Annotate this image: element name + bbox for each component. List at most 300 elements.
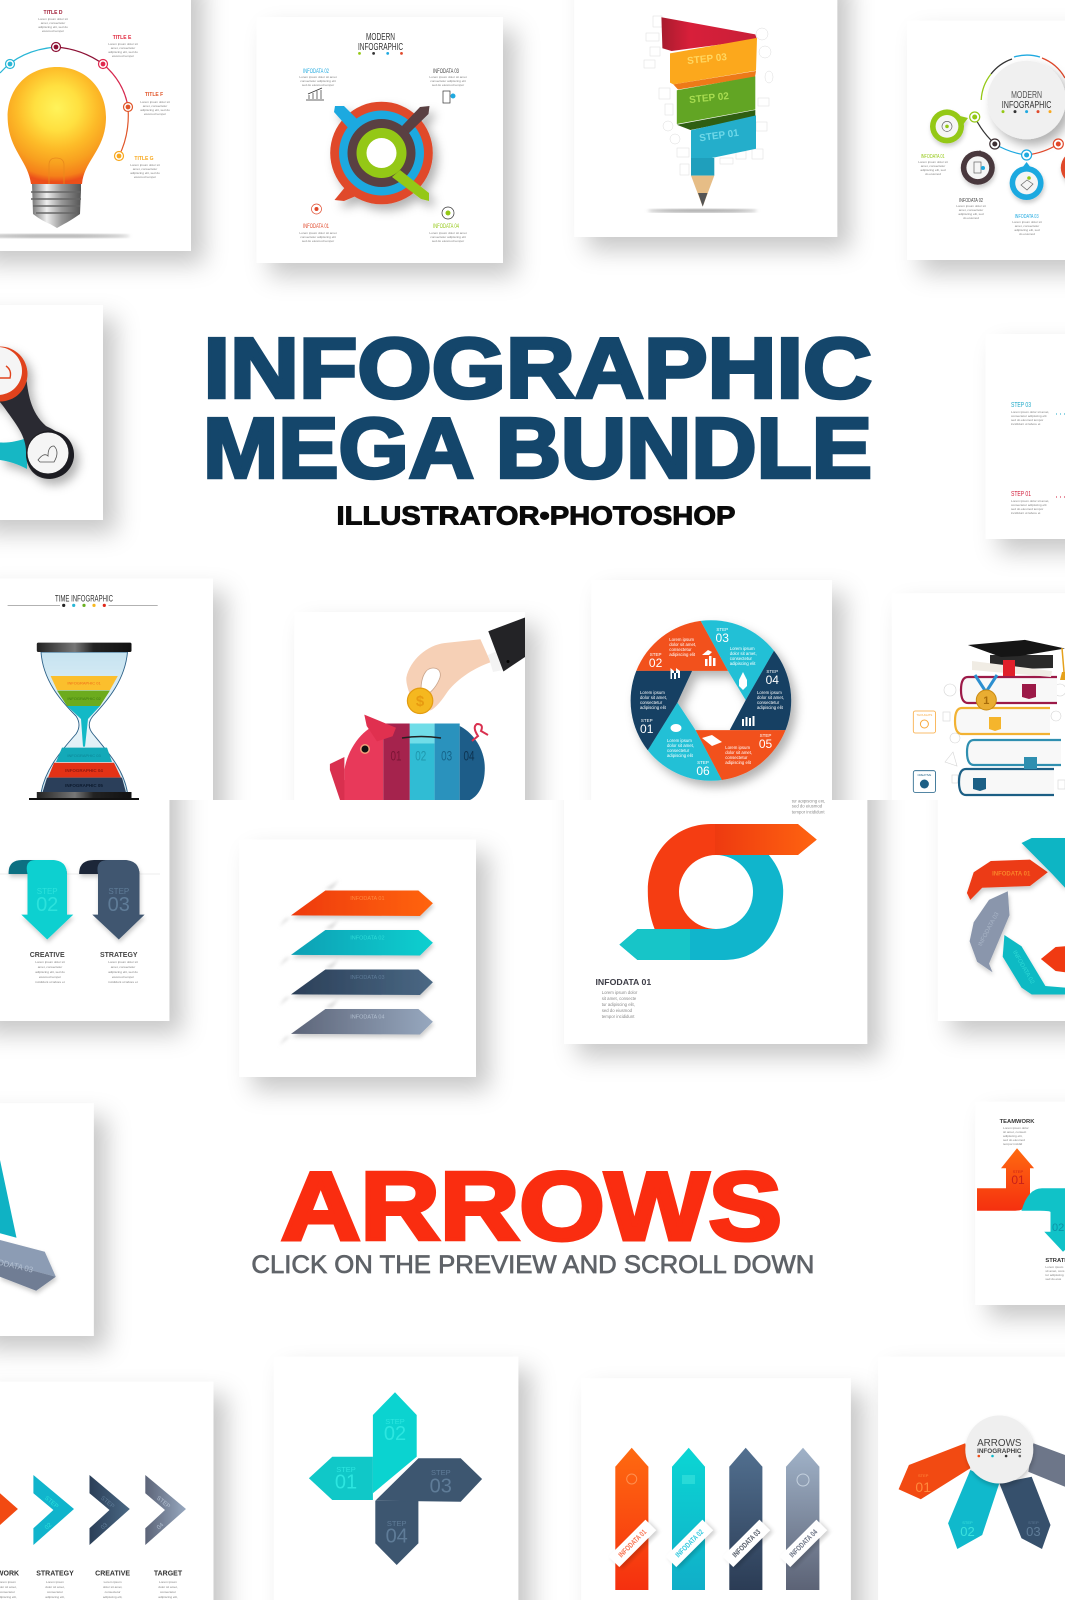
- red arrow up: STEP: [1013, 1169, 1024, 1174]
- step numbers: 03: [716, 631, 729, 645]
- step numbers: 02: [649, 656, 663, 670]
- chevrons: STEP: [99, 1495, 115, 1510]
- petal 02 teal: [948, 1470, 999, 1549]
- panel: down arrows: [0, 760, 169, 1021]
- panel: hourglass: [0, 579, 213, 839]
- arrow 02: INFODATA 02: [673, 1527, 705, 1559]
- chevrons: STEP: [43, 1495, 59, 1510]
- central disc: INFOGRAPHIC: [977, 1449, 1022, 1455]
- teal ribbon: [0, 1160, 16, 1238]
- step numbers: 04: [766, 673, 779, 687]
- chevron captions: Lorem ipsum: [104, 1580, 122, 1584]
- teal arrow down: [1022, 1188, 1065, 1252]
- step labels: adipiscing elit, sed do: [38, 25, 68, 29]
- arrow red small: [1041, 946, 1065, 972]
- panel: cross arrows: [274, 1357, 518, 1600]
- flag 04: [291, 1009, 433, 1034]
- step 01: sed do eiusmod tempor: [1011, 507, 1043, 511]
- flag 02: [291, 930, 433, 956]
- arrow red 01: [967, 860, 1048, 900]
- step labels: TITLE G: [134, 156, 154, 162]
- step texts: adipiscing elit: [669, 652, 696, 657]
- step numbers: STEP: [108, 887, 129, 896]
- bookmarks: [973, 684, 1037, 791]
- arrow step 01: [309, 1457, 373, 1500]
- arrow step 03: [79, 860, 145, 940]
- pin labels: Lorem ipsum dolor sit: [918, 160, 948, 164]
- step labels: [38, 10, 170, 179]
- data labels: sed do eiusmod tempor: [432, 83, 464, 87]
- lower background: [0, 800, 1065, 1600]
- arrow teal bottom: [1003, 935, 1065, 994]
- step numbers: 04: [386, 1525, 408, 1547]
- captions: adipiscing elit, sed do: [108, 970, 138, 974]
- arrow 03: [723, 1448, 770, 1590]
- data text: [596, 798, 825, 1019]
- data labels: INFODATA 04: [433, 224, 459, 230]
- step labels: amet, consectetur: [41, 21, 65, 25]
- coin: [407, 688, 433, 714]
- step labels: amet, consectetur: [133, 167, 157, 171]
- panel: hexagon cycle: [630, 582, 857, 800]
- step texts: consectetur: [667, 748, 690, 753]
- step labels: eiusmod tempor: [144, 112, 166, 116]
- outer arcs: [981, 55, 1065, 100]
- captions: eiusmod tempor: [112, 975, 134, 979]
- flag fold tails: [279, 880, 339, 1046]
- chevron captions: adipiscing elit,: [103, 1595, 122, 1599]
- data labels: consectetur adipiscing elit: [300, 235, 336, 239]
- step labels: adipiscing elit, sed do: [108, 50, 138, 54]
- chevron captions: TARGET: [154, 1570, 183, 1578]
- step numbers: STEP: [716, 627, 728, 632]
- captions: CREATIVE: [30, 952, 65, 959]
- data labels: consectetur adipiscing elit: [430, 235, 466, 239]
- step 03: sed do eiusmod tempor: [1011, 418, 1043, 422]
- step numbers: [640, 627, 779, 778]
- panel heading: INFOGRAPHIC: [358, 42, 403, 53]
- icon boxes: [913, 711, 936, 792]
- hourglass chart: INFOGRAPHIC 03: [67, 753, 101, 758]
- step numbers: 02: [384, 1423, 406, 1445]
- chevrons: 02: [44, 1522, 54, 1531]
- data labels: Lorem ipsum dolor sit amet: [299, 75, 337, 79]
- flag 02: INFODATA 02: [350, 936, 385, 942]
- step labels: TITLE E: [113, 35, 132, 41]
- arrow 02: [666, 1448, 713, 1590]
- knot shape: [0, 346, 74, 479]
- arrow 04: [780, 1448, 827, 1590]
- panel: chevron arrows: [0, 1382, 214, 1600]
- step numbers: 03: [108, 894, 130, 916]
- chevron captions: adipiscing elit,: [45, 1595, 65, 1599]
- step labels: amet, consectetur: [111, 46, 135, 50]
- step labels: adipiscing elit, sed do: [130, 171, 160, 175]
- data labels: Lorem ipsum dolor sit amet: [429, 75, 467, 79]
- data labels: INFODATA 02: [303, 69, 329, 75]
- petal 01 red: [899, 1443, 970, 1499]
- pin icons: [942, 121, 1033, 190]
- coin: $: [416, 693, 425, 710]
- panel: modern infographic pins: [907, 21, 1065, 260]
- petal 02 teal: 02: [960, 1524, 975, 1539]
- grey arrow: [0, 1240, 56, 1291]
- step texts: [640, 637, 784, 765]
- step texts: Lorem ipsum: [757, 690, 782, 695]
- captions: incididunt ut labore et: [35, 980, 65, 984]
- petal 03 navy: STEP: [1028, 1520, 1039, 1525]
- captions: Lorem ipsum dolor sit: [108, 960, 138, 964]
- pin labels: INFODATA 01: [921, 154, 945, 160]
- data labels: sed do eiusmod tempor: [302, 239, 334, 243]
- step numbers: STEP: [387, 1519, 406, 1528]
- teamwork text: tempor incidid: [1003, 1142, 1023, 1146]
- chevron captions: Lorem ipsum: [159, 1580, 177, 1584]
- section subtitle: CLICK ON THE PREVIEW AND SCROLL DOWN: [251, 1251, 814, 1279]
- panel heading: TIME INFOGRAPHIC: [55, 593, 113, 603]
- hourglass chart: INFOGRAPHIC 05: [65, 783, 103, 788]
- step texts: Lorem ipsum: [730, 646, 755, 651]
- strategy text: sit amet, cons: [1045, 1269, 1065, 1273]
- icon outlines: [0, 366, 57, 462]
- captions: [30, 952, 138, 984]
- panel: light bulb timeline: [0, 0, 191, 251]
- panel: triangle arrow: [0, 1103, 94, 1336]
- arrow 01: INFODATA 01: [616, 1527, 648, 1559]
- pin labels: [918, 154, 1042, 236]
- pin labels: adipiscing elit, sed: [920, 168, 946, 172]
- panel: graduation books: [892, 593, 1065, 853]
- step numbers: STEP: [431, 1468, 451, 1477]
- data labels: consectetur adipiscing elit: [300, 79, 336, 83]
- step texts: consectetur: [640, 700, 663, 705]
- step texts: consectetur: [669, 647, 692, 652]
- pin labels: do eiusmod: [1019, 232, 1035, 236]
- chevron captions: consectetur: [47, 1590, 63, 1594]
- data text: sed do eiusmod: [792, 804, 823, 808]
- chevron captions: [0, 1570, 183, 1599]
- step texts: adipiscing elit: [730, 661, 756, 666]
- chevron captions: dolor sit amet,: [45, 1585, 65, 1589]
- chevron captions: adipiscing elit,: [158, 1595, 178, 1599]
- icon boxes: CREATIVE: [918, 773, 931, 777]
- data text: sed do eiusmod: [602, 1008, 633, 1013]
- central disc: ARROWS: [977, 1438, 1022, 1449]
- data labels: sed do eiusmod tempor: [302, 83, 334, 87]
- petal 03 navy: 03: [1026, 1524, 1041, 1539]
- step 03: [1011, 402, 1065, 426]
- data labels: INFODATA 01: [303, 224, 329, 230]
- step texts: adipiscing elit: [640, 705, 667, 710]
- medal: [975, 675, 997, 710]
- data text: tempor incididunt: [602, 1014, 635, 1019]
- pin labels: amet, consectetur: [959, 208, 983, 212]
- data text: tempor incididunt: [792, 810, 825, 814]
- pig body: 02: [415, 747, 426, 763]
- chevron captions: consectetur: [160, 1590, 176, 1594]
- central disc: [965, 1416, 1033, 1484]
- step labels: TITLE D: [44, 10, 63, 16]
- step texts: Lorem ipsum: [640, 690, 665, 695]
- step 03: STEP 03: [1011, 402, 1031, 409]
- arrow step 02: [373, 1392, 417, 1493]
- step numbers: 02: [36, 894, 58, 916]
- title: INFOGRAPHIC: [204, 322, 872, 417]
- step texts: dolor sit amet,: [730, 651, 757, 656]
- step numbers: 06: [696, 764, 710, 778]
- step numbers: STEP: [650, 652, 661, 657]
- step texts: Lorem ipsum: [725, 745, 750, 750]
- teamwork text: [1000, 1119, 1035, 1146]
- step texts: adipiscing elit: [757, 705, 784, 710]
- data text: tur adipiscing elit,: [792, 798, 825, 804]
- teamwork text: Lorem ipsum dolor: [1003, 1126, 1029, 1130]
- hourglass chart: [29, 643, 139, 800]
- step numbers: STEP: [697, 760, 709, 765]
- step labels: eiusmod tempor: [42, 29, 64, 33]
- step labels: STEP 03: [687, 52, 728, 67]
- panel heading: MODERN: [366, 32, 395, 43]
- chevrons: STEP: [155, 1495, 171, 1510]
- chevron captions: Lorem ipsum: [46, 1580, 64, 1584]
- arrow red 01: INFODATA 01: [992, 872, 1031, 878]
- title: MEGA BUNDLE: [203, 402, 872, 497]
- chevron captions: dolor sit amet,: [158, 1585, 178, 1589]
- step labels: Lorem ipsum dolor sit: [108, 42, 138, 46]
- panel heading: [358, 32, 403, 55]
- pin labels: amet, consectetur: [1015, 224, 1039, 228]
- step 01: incididunt ut labore et: [1011, 511, 1041, 515]
- step 01: [1011, 491, 1065, 515]
- captions: amet, consectetur: [38, 965, 62, 969]
- step numbers: 01: [335, 1471, 357, 1493]
- doodles: [943, 684, 1065, 789]
- step numbers: 05: [759, 737, 772, 751]
- pin labels: amet, consectetur: [921, 164, 945, 168]
- step 01: Lorem ipsum dolor sit amet,: [1011, 499, 1049, 503]
- pig body: 01: [390, 747, 402, 763]
- captions: STRATEGY: [100, 952, 138, 959]
- data labels: INFODATA 03: [433, 69, 459, 75]
- strategy text: [1045, 1258, 1065, 1281]
- step 01: STEP 01: [1011, 491, 1031, 498]
- arrow step 03: [375, 1458, 482, 1502]
- petal 04 grey: [1028, 1443, 1065, 1487]
- petal 01 red: 01: [915, 1479, 931, 1495]
- arrow grey: INFODATA 03: [978, 911, 1001, 947]
- step labels: eiusmod tempor: [134, 175, 156, 179]
- pins: [930, 109, 1065, 200]
- doodle icons: [644, 16, 773, 175]
- step numbers: [36, 887, 130, 916]
- captions: incididunt ut labore et: [108, 980, 138, 984]
- pig body: 03: [441, 747, 452, 763]
- step 03: Lorem ipsum dolor sit amet,: [1011, 410, 1049, 414]
- panel: team arrows: [975, 1102, 1065, 1305]
- strategy text: sed do eius: [1045, 1277, 1062, 1281]
- chevron captions: CREATIVE: [95, 1570, 130, 1578]
- medal: 1: [983, 695, 989, 707]
- panel: cycle arrows: [938, 760, 1065, 1021]
- panel: step list: [988, 402, 1065, 564]
- section title: arrows: ARROWS: [281, 1154, 782, 1261]
- data text: INFODATA 01: [596, 977, 651, 987]
- data labels: sed do eiusmod tempor: [432, 239, 464, 243]
- data text: Lorem ipsum dolor: [602, 990, 638, 995]
- pin labels: adipiscing elit, sed: [958, 212, 984, 216]
- bulb shadow: [0, 234, 130, 238]
- step labels: Lorem ipsum dolor sit: [140, 100, 170, 104]
- strategy text: tur adipiscing: [1045, 1273, 1064, 1277]
- step texts: adipiscing elit: [725, 760, 752, 765]
- cycle chart: [631, 620, 791, 781]
- step labels: amet, consectetur: [143, 104, 167, 108]
- panel heading: [8, 595, 158, 607]
- data labels: [299, 69, 467, 243]
- step labels: STEP 01: [699, 128, 740, 144]
- hand with suit sleeve: [406, 618, 525, 710]
- step numbers: [335, 1417, 452, 1547]
- step texts: consectetur: [757, 700, 780, 705]
- red arrow up: 01: [1011, 1173, 1025, 1187]
- upper collage section: [0, 0, 1065, 853]
- panel: stacked flags: [239, 840, 476, 1077]
- icon boxes: THOUGHTS: [917, 713, 932, 717]
- teamwork text: sit amet, consect: [1003, 1130, 1026, 1134]
- step texts: dolor sit amet,: [640, 695, 667, 700]
- ribbon pencil: [647, 17, 757, 212]
- step 01: consectetur adipiscing elit: [1011, 503, 1047, 507]
- chevrons: 04: [156, 1522, 166, 1531]
- step texts: dolor sit amet,: [757, 695, 784, 700]
- chevron captions: consectetur: [105, 1590, 121, 1594]
- step labels: Lorem ipsum dolor sit: [38, 17, 68, 21]
- data labels: Lorem ipsum dolor sit amet: [299, 231, 337, 235]
- step labels: [687, 52, 740, 144]
- teamwork text: adipiscing elit,: [1003, 1134, 1023, 1138]
- step labels: TITLE F: [145, 92, 163, 98]
- chevrons: 03: [100, 1522, 110, 1531]
- step labels: STEP 02: [689, 91, 730, 106]
- step texts: dolor sit amet,: [667, 743, 694, 748]
- step texts: consectetur: [730, 656, 752, 661]
- panel: pencil ribbon: [574, 0, 837, 237]
- captions: adipiscing elit, sed do: [35, 970, 65, 974]
- step labels: adipiscing elit, sed do: [140, 108, 170, 112]
- orange arrow: [648, 824, 817, 929]
- step labels: Lorem ipsum dolor sit: [130, 163, 160, 167]
- subtitle: ILLUSTRATOR•PHOTOSHOP: [336, 502, 736, 530]
- step 03: consectetur adipiscing elit: [1011, 414, 1047, 418]
- step numbers: 01: [640, 722, 654, 736]
- captions: eiusmod tempor: [39, 975, 61, 979]
- step numbers: 03: [430, 1475, 452, 1497]
- captions: amet, consectetur: [111, 965, 135, 969]
- step texts: Lorem ipsum: [669, 637, 695, 642]
- arrow 03: INFODATA 03: [730, 1527, 762, 1559]
- data text: sit amet, consecte: [602, 996, 637, 1001]
- arrow 04: INFODATA 04: [787, 1527, 820, 1559]
- panel: vertical arrows: [581, 1378, 851, 1600]
- captions: Lorem ipsum dolor sit: [35, 960, 65, 964]
- data labels: Lorem ipsum dolor sit amet: [429, 231, 467, 235]
- lower collage section: [0, 760, 1065, 1600]
- hourglass chart: INFOGRAPHIC 02: [67, 696, 101, 701]
- petal 02 teal: STEP: [962, 1520, 973, 1525]
- chart: concentric rings: [330, 102, 433, 204]
- pin labels: Lorem ipsum dolor sit: [956, 204, 986, 208]
- hourglass chart: INFOGRAPHIC 01: [67, 680, 101, 686]
- book stack: [955, 677, 1061, 795]
- chevron captions: STRATEGY: [36, 1570, 74, 1578]
- arrow grey: [970, 891, 1010, 972]
- step texts: Lorem ipsum: [667, 738, 692, 743]
- panel: concentric target: [256, 17, 503, 263]
- flag 03: [291, 970, 433, 995]
- step texts: dolor sit amet,: [669, 642, 696, 647]
- small icons: [306, 88, 456, 219]
- chevron captions: dolor sit amet,: [103, 1585, 122, 1589]
- step numbers: STEP: [37, 887, 58, 896]
- petal 01 red: STEP: [918, 1473, 929, 1478]
- step 03: incididunt ut labore et: [1011, 422, 1041, 426]
- central disc: [987, 61, 1065, 139]
- central disc: MODERN: [1011, 89, 1042, 101]
- hourglass chart: INFOGRAPHIC 04: [65, 768, 103, 773]
- arrow teal bottom: INFODATA 02: [1011, 950, 1035, 986]
- teal arrow: [619, 855, 783, 960]
- red arrow up: [977, 1148, 1034, 1211]
- panel: knot circles: [0, 305, 103, 520]
- pin labels: Lorem ipsum dolor sit: [1012, 220, 1042, 224]
- arrow 01: [609, 1448, 656, 1590]
- cycle icons: [668, 650, 754, 746]
- arrow step 04: [375, 1501, 418, 1565]
- teamwork text: sed do eiusmod: [1003, 1138, 1025, 1142]
- pin labels: INFODATA 03: [1015, 214, 1039, 220]
- pig body: [330, 715, 488, 800]
- teamwork text: TEAMWORK: [1000, 1119, 1035, 1125]
- step numbers: STEP: [336, 1465, 356, 1474]
- flag 03: INFODATA 03: [350, 975, 385, 981]
- arc timeline: [0, 42, 132, 160]
- step numbers: STEP: [766, 669, 778, 674]
- petal 03 navy: [999, 1477, 1050, 1549]
- pin labels: adipiscing elit, sed: [1014, 228, 1040, 232]
- flag 01: [291, 890, 433, 916]
- pig body: 04: [464, 747, 475, 763]
- timeline connectors: [970, 112, 1063, 160]
- data text: tur adipiscing elit,: [602, 1002, 635, 1007]
- step numbers: STEP: [641, 718, 653, 723]
- graduation cap and diploma: [968, 640, 1065, 680]
- step numbers: STEP: [760, 733, 771, 738]
- flag 01: INFODATA 01: [350, 896, 385, 902]
- strategy text: Lorem ipsum: [1045, 1265, 1064, 1269]
- step texts: consectetur: [725, 755, 748, 760]
- pin labels: do eiusmod: [963, 216, 979, 220]
- arrow teal top: [1022, 838, 1065, 888]
- panel: fan arrows: [878, 1357, 1065, 1600]
- step numbers: STEP: [385, 1417, 405, 1426]
- panel: piggy bank: [330, 614, 550, 800]
- icon: light bulb: [8, 67, 106, 228]
- data labels: consectetur adipiscing elit: [430, 79, 466, 83]
- teal arrow down: 02: [1052, 1222, 1064, 1234]
- step labels: eiusmod tempor: [112, 54, 134, 58]
- panel: S-shaped arrows: [564, 760, 867, 1044]
- title: [207, 336, 872, 480]
